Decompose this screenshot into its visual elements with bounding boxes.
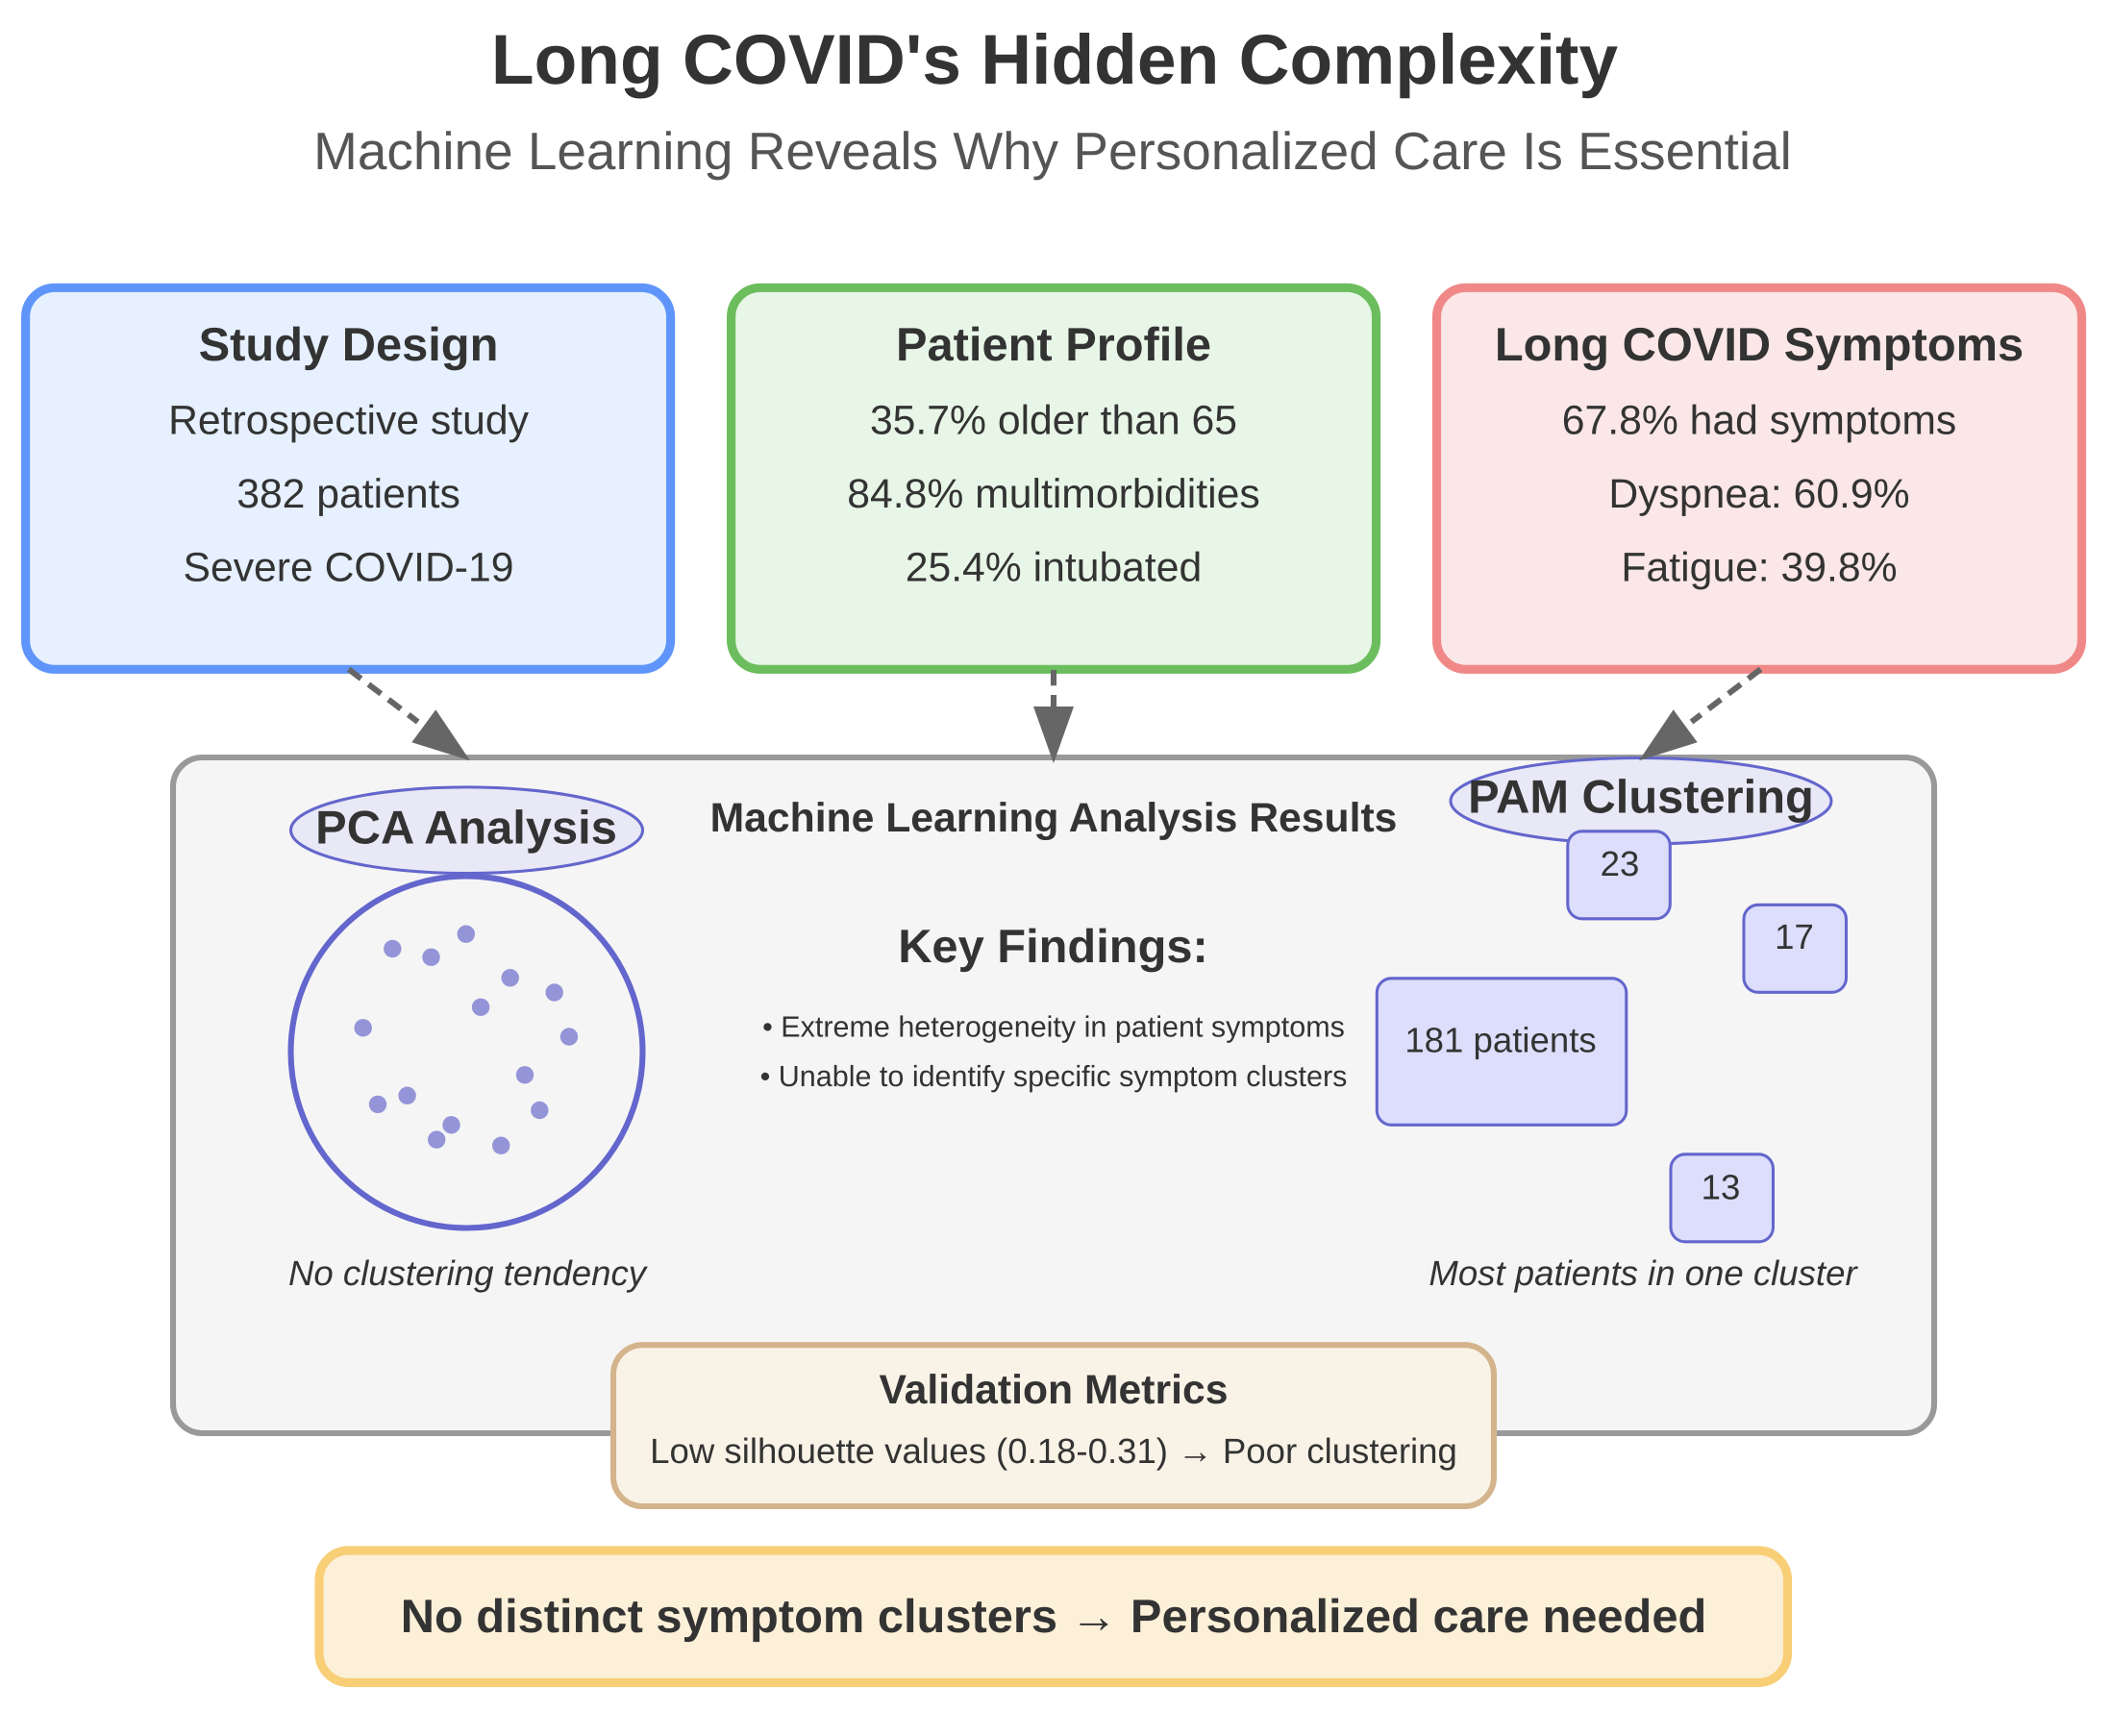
cluster: 23 — [1568, 831, 1670, 919]
panel: long covid symptoms: Long COVID Symptoms — [1495, 319, 2024, 371]
cluster: 23: 23 — [1601, 844, 1639, 883]
panel: patient profile — [732, 287, 1377, 669]
panel heading: Machine Learning Analysis Results — [710, 795, 1397, 841]
panel: study design — [26, 287, 671, 669]
key findings: • Extreme heterogeneity in patient symptoms — [762, 1011, 1345, 1044]
pca heading — [290, 787, 642, 873]
arrow: patient profile to ml panel — [1033, 670, 1074, 763]
panel: study design: Retrospective study — [168, 398, 530, 444]
validation metrics box: Low silhouette values (0.18-0.31) → Poor clustering — [650, 1431, 1457, 1471]
conclusion box: No distinct symptom clusters → Personalized care needed — [401, 1591, 1706, 1643]
pca caption: No clustering tendency — [288, 1253, 649, 1293]
pam heading — [1451, 757, 1831, 844]
arrow: study design to pca — [349, 669, 470, 760]
panel: long covid symptoms: Fatigue: 39.8% — [1621, 544, 1898, 590]
title: Long COVID's Hidden Complexity — [491, 20, 1618, 99]
panel: patient profile: Patient Profile — [896, 319, 1211, 371]
cluster: 13 — [1671, 1154, 1773, 1242]
pca heading: PCA Analysis — [315, 802, 617, 854]
panel: study design: 382 patients — [236, 471, 460, 517]
pam heading: PAM Clustering — [1468, 772, 1814, 824]
panel: long covid symptoms: Dyspnea: 60.9% — [1608, 471, 1910, 517]
panel: long covid symptoms: 67.8% had symptoms — [1562, 398, 1956, 444]
pca scatter circle — [290, 877, 642, 1228]
panel: patient profile: 25.4% intubated — [906, 544, 1202, 590]
arrow: symptoms to pam — [1639, 669, 1761, 760]
pam caption: Most patients in one cluster — [1429, 1253, 1858, 1293]
panel: machine learning analysis results — [173, 757, 1934, 1433]
cluster: 181 patients: 181 patients — [1404, 1021, 1597, 1059]
key findings: Key Findings: — [898, 921, 1208, 973]
panel: study design: Study Design — [199, 319, 498, 371]
cluster: 181 patients — [1377, 979, 1627, 1125]
key findings — [760, 921, 1347, 1093]
subtitle: Machine Learning Reveals Why Personalized Care Is Essential — [313, 121, 1792, 181]
cluster: 17 — [1744, 905, 1846, 992]
cluster: 17: 17 — [1775, 917, 1814, 956]
key findings: • Unable to identify specific symptom clusters — [760, 1060, 1347, 1093]
panel: long covid symptoms — [1436, 287, 2082, 669]
validation metrics box — [613, 1345, 1494, 1506]
panel: patient profile: 35.7% older than 65 — [870, 398, 1237, 444]
cluster: 13: 13 — [1702, 1167, 1740, 1207]
panel: patient profile: 84.8% multimorbidities — [847, 471, 1260, 517]
conclusion box — [319, 1550, 1788, 1682]
panel: study design: Severe COVID-19 — [183, 544, 514, 590]
validation metrics box: Validation Metrics — [880, 1367, 1228, 1413]
